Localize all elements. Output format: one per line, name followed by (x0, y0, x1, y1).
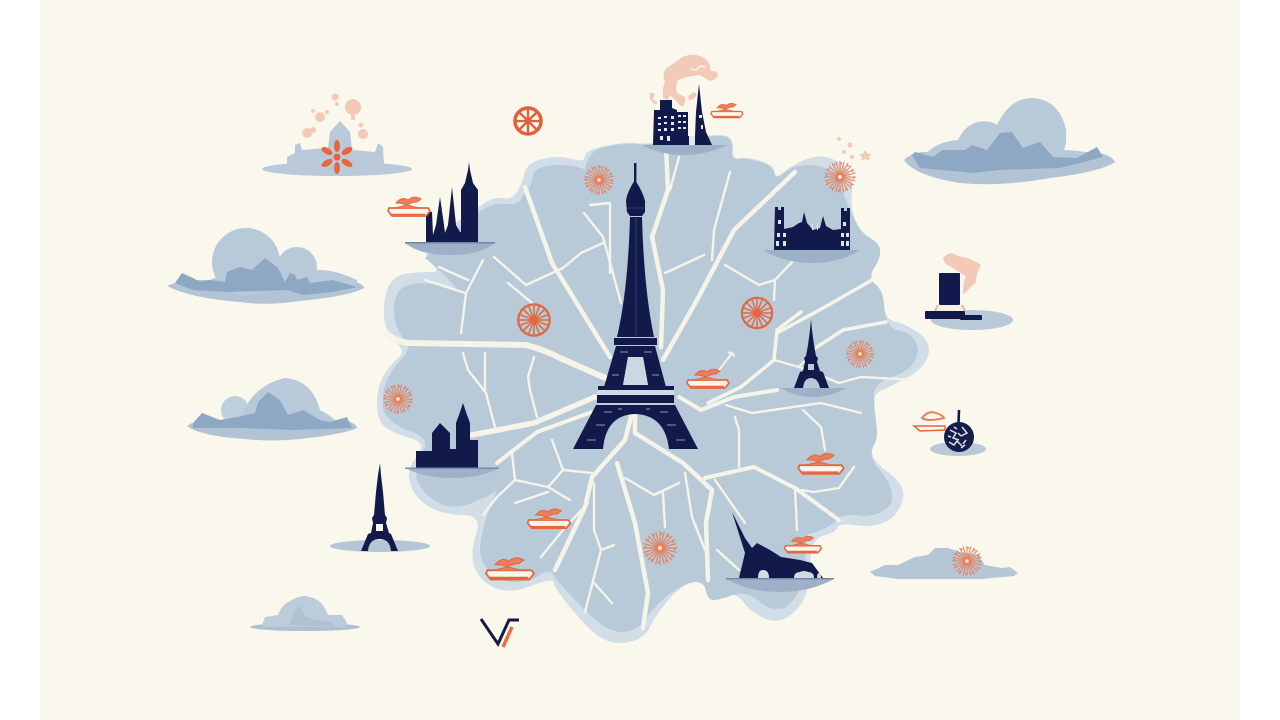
main roads (386, 147, 886, 628)
landmark: lower left building (405, 403, 499, 478)
landmark: dark monument (726, 512, 834, 592)
minor roads (425, 157, 915, 612)
orange flower (320, 140, 354, 174)
cloud: middle left (187, 378, 357, 440)
logo mark (481, 619, 519, 647)
landmark: small Eiffel lower left (330, 463, 430, 552)
pink confetti (302, 94, 368, 139)
landmark: gothic castle (763, 207, 860, 263)
map outer fringe (377, 135, 929, 643)
wheel icons (515, 108, 772, 336)
landmark: small Eiffel right (781, 319, 846, 397)
cloud: bottom right (870, 548, 1018, 579)
Eiffel Tower centre (573, 163, 698, 449)
landmark: factory (642, 84, 728, 155)
map inner fill (383, 136, 918, 632)
cloud: upper left (167, 228, 364, 304)
burst icons (383, 161, 982, 576)
tray icons (388, 103, 844, 579)
skyline cloud upper left (262, 94, 412, 176)
map of Paris (377, 135, 929, 643)
confetti near upper right burst (837, 137, 872, 161)
smoke plume factory (650, 55, 718, 107)
cloud: bottom left (250, 596, 360, 631)
ball ornament with tray (914, 410, 986, 456)
furnace with smoke (925, 253, 1013, 330)
cloud: top right (904, 98, 1115, 184)
landmark: left skyline building (405, 162, 495, 255)
